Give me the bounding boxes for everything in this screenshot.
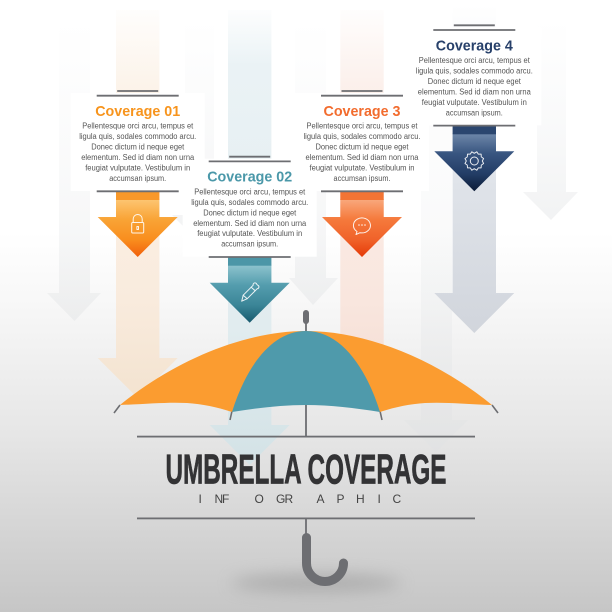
icon: chat bubble [353,218,370,234]
top rules [97,91,179,96]
body text: Pellentesque orci arcu, tempus et [419,56,531,65]
bottom rule [433,125,515,127]
top divider [137,436,475,438]
umbrella [114,310,498,538]
icon: pencil [242,283,259,301]
white text backings [71,27,541,257]
body text: Donec dictum id neque eget [91,143,185,152]
heading: Coverage 3 [324,103,400,120]
heading: Coverage 02 [207,169,292,186]
handle shadow [231,574,401,592]
arrow [210,265,290,323]
arrow cap [453,125,496,134]
body text: elementum. Sed id diam non urna [418,87,531,96]
top rules [321,91,403,96]
heading: Coverage 01 [95,103,180,120]
subtitle: INFOGRAPHIC [198,492,402,506]
bottom rule [209,256,291,258]
body text: ligula quis, sodales commodo arcu. [191,198,308,207]
body text: accumsan ipsum. [334,174,390,183]
top rules [433,25,515,30]
arrow [98,199,178,257]
arrow cap [228,257,271,266]
umbrella ferrule [303,310,309,324]
bottom divider [137,518,475,519]
body text: feugiat vulputate. Vestibulum in [310,164,414,172]
umbrella canopy: orange left panel [120,331,306,412]
body text: accumsan ipsum. [109,174,166,183]
body text: elementum. Sed id diam non urna [306,153,419,162]
bottom rule [321,190,403,192]
faded arrow: inner left grey [172,20,226,242]
body text: Donec dictum id neque eget [428,77,522,86]
panel: coverage 4 [416,25,533,191]
body text: ligula quis, sodales commodo arcu. [79,132,196,141]
umbrella canopy: orange right panel [306,331,492,412]
faded arrow: teal [210,10,290,465]
icon: gear [465,152,484,170]
arrow cap [116,191,159,200]
arrow [322,199,402,257]
icon: padlock [132,214,144,233]
umbrella handle [306,538,344,582]
faded arrow: far right grey [523,20,578,220]
arrow cap [340,191,384,200]
body text: elementum. Sed id diam non urna [193,219,307,228]
body text: accumsan ipsum. [446,108,503,117]
faded arrow: centre grey [289,20,338,305]
body text: Pellentesque orci arcu, tempus et [194,187,306,196]
body text: feugiat vulputate. Vestibulum in [422,98,527,107]
rib tips [114,405,498,420]
faded arrow: far left grey [47,20,101,321]
body text: ligula quis, sodales commodo arcu. [304,132,420,141]
panel: coverage 3 [304,91,420,257]
faded arrow: right-centre grey [404,20,468,452]
body text: Pellentesque orci arcu, tempus et [82,122,194,131]
panel: coverage 01 [79,91,196,257]
heading: Coverage 4 [436,37,513,54]
umbrella shaft [305,322,307,538]
body text: ligula quis, sodales commodo arcu. [416,66,533,76]
body text: feugiat vulputate. Vestibulum in [197,229,302,238]
panel: coverage 02 [191,157,308,323]
faded arrow: navy [434,5,514,333]
arrow [434,133,514,191]
faded background arrows [47,5,578,465]
faded arrow: red orange [322,10,402,398]
faded arrow: orange [98,10,178,398]
umbrella canopy: teal panel [232,331,380,412]
top rules [209,157,291,161]
body text: elementum. Sed id diam non urna [81,153,195,162]
body text: Pellentesque orci arcu, tempus et [306,122,418,131]
body text: accumsan ipsum. [221,240,278,249]
body text: Donec dictum id neque eget [203,208,297,217]
bottom rule [97,190,179,192]
body text: feugiat vulputate. Vestibulum in [85,164,190,172]
body text: Donec dictum id neque eget [316,143,409,152]
